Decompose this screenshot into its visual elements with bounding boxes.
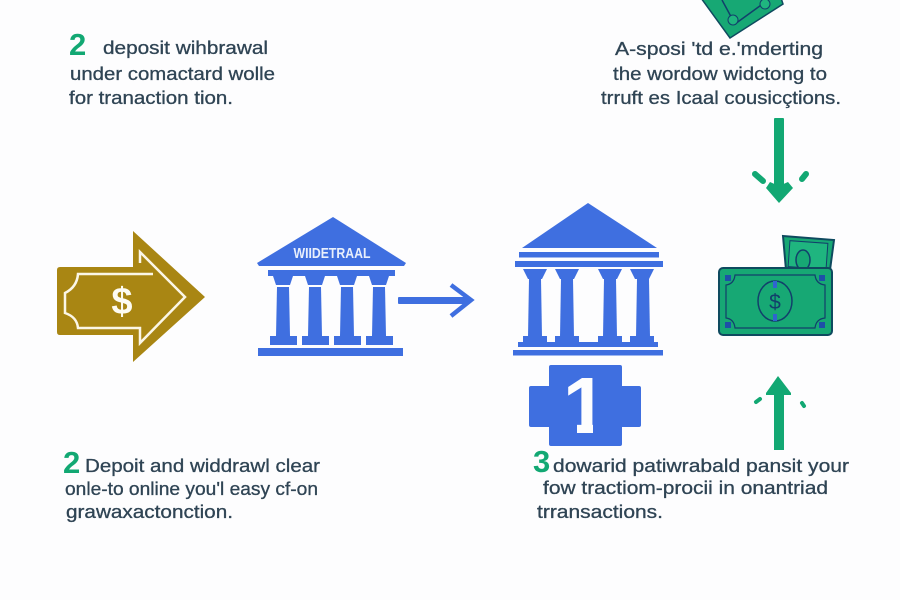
dollar sign on gold note: $: [111, 281, 133, 323]
step text: top left: deposit wihbrawal: [103, 37, 268, 58]
step text: bottom right: [537, 455, 849, 522]
icon: falling banknote cut by top edge: [701, 0, 783, 38]
step text: top left: for tranaction tion.: [69, 87, 233, 108]
arrow: blue right arrow between banks: [398, 285, 471, 316]
step text: bottom left: onle-to online you'l easy cf-on: [65, 478, 318, 499]
text block: top right description: [601, 38, 841, 108]
arrow: green up arrow: [756, 376, 804, 450]
icon: gold banknote arrow: [57, 231, 205, 362]
step text: bottom left: [65, 455, 320, 522]
step text: bottom left: grawaxactonction.: [66, 501, 233, 522]
dollar sign on green note: $: [769, 291, 781, 314]
step text: bottom right: fow tractiom-procii in onantriad: [543, 477, 828, 498]
back banknote: [783, 236, 834, 270]
text block: bottom right step: [533, 444, 849, 522]
step text: bottom left: Depoit and widdrawl clear: [85, 455, 320, 476]
step number: bottom right: 3: [533, 444, 550, 479]
step number: bottom left: 2: [63, 445, 80, 480]
step text: top left: [69, 37, 275, 108]
text block: top left step: [69, 27, 275, 108]
icon: green banknotes: [719, 236, 834, 335]
step text: top left: under comactard wolle: [70, 63, 275, 84]
badge number: 1: [563, 361, 607, 450]
step number: top left: 2: [69, 27, 86, 62]
bank label: WIIDETRAAL: [294, 245, 370, 262]
step text: bottom right: dowarid patiwrabald pansit your: [553, 455, 849, 476]
text block: top right description: the wordow widctong to: [613, 63, 827, 84]
icon: bank with label: [257, 217, 406, 356]
text block: bottom left step: [63, 445, 320, 522]
step text: bottom right: trransactions.: [537, 501, 663, 522]
text block: top right description: A-sposi 'td e.'mderting: [615, 38, 823, 59]
badge: blue plus-shaped number 1: [529, 361, 641, 450]
icon: bank: [513, 203, 663, 356]
arrow: green down arrow: [755, 118, 806, 203]
text block: top right description: trruft es Icaal cousicçtions.: [601, 87, 841, 108]
